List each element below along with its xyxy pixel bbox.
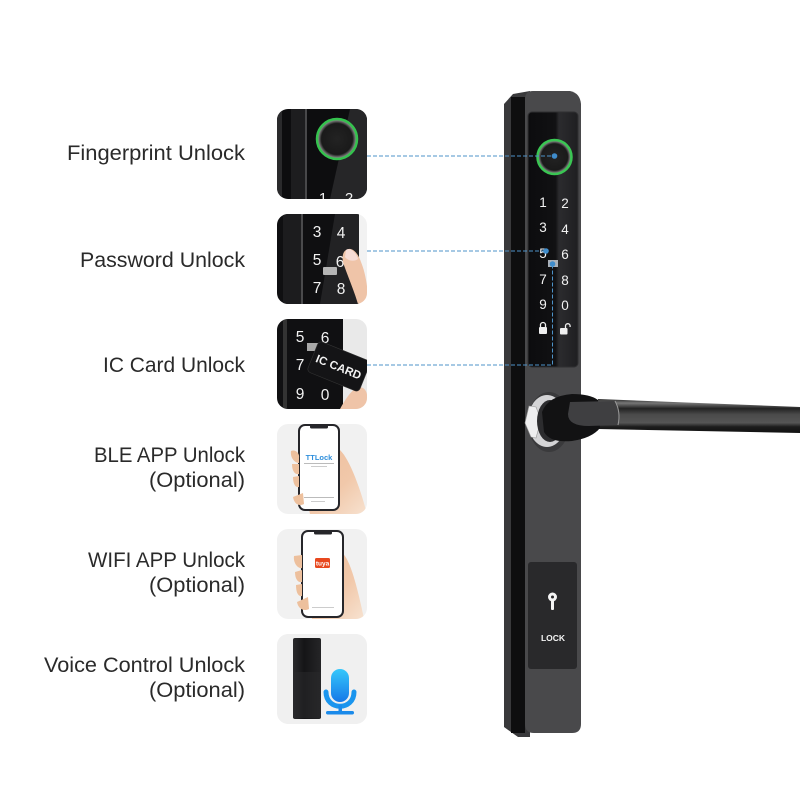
thumbnail: IC card on keypad: 7 [296,357,304,374]
thumbnail: IC card on keypad: 5 [296,329,304,346]
thumbnail: smart speaker and microphone [277,634,367,724]
keypad digits: 9 [539,297,547,312]
lever handle [525,392,800,452]
thumbnail: password keypad with finger: 6 [336,254,344,271]
label: BLE APP Unlock (Optional): BLE APP Unlock [94,443,245,467]
label: WIFI APP Unlock (Optional): WIFI APP Unlock [88,548,245,572]
thumbnail: password keypad with finger: 8 [337,281,345,298]
thumbnail: password keypad with finger [277,214,368,304]
label: Voice Control Unlock (Optional): (Optional) [149,678,245,702]
callout line: fingerprint [367,153,557,159]
keypad digits: 4 [561,222,569,237]
door lock body [504,91,800,737]
label: Password Unlock: Password Unlock [80,248,245,272]
keypad digits: 8 [561,273,569,288]
label: Voice Control Unlock (Optional) [44,653,245,702]
lock side edge [504,91,530,737]
thumbnail: fingerprint sensor [277,109,367,207]
thumbnail: fingerprint sensor: 1 [319,190,327,207]
keypad digits: 1 [539,195,547,210]
keypad digits: 7 [539,272,547,287]
label: BLE APP Unlock (Optional) [94,443,245,492]
label: WIFI APP Unlock (Optional) [88,548,245,597]
keypad digits: 2 [561,196,569,211]
thumbnail: password keypad with finger: 7 [313,280,321,297]
label: BLE APP Unlock (Optional): (Optional) [149,468,245,492]
microphone icon [326,669,354,714]
thumbnail: IC card on keypad [277,319,371,409]
lock icon [539,322,547,334]
thumbnail: Tuya phone in hand [277,529,367,619]
Tuya logo: tuya [316,560,330,568]
label: WIFI APP Unlock (Optional): (Optional) [149,573,245,597]
card reader icon [548,260,558,267]
fingerprint ring [538,140,572,174]
touch panel [528,112,578,367]
keypad digits: 6 [561,247,569,262]
thumbnail: IC card on keypad: 0 [321,387,330,404]
thumbnail: password keypad with finger: 3 [313,224,321,241]
thumbnail: TTLock phone in hand: TTLock [306,453,333,462]
thumbnail: TTLock phone in hand [277,424,367,514]
keypad digits: 5 [539,246,547,261]
speaker [293,638,321,719]
label: Voice Control Unlock (Optional): Voice Control Unlock [44,653,245,677]
keyhole icon [548,592,557,610]
keypad digits: 0 [561,298,569,313]
label: IC Card Unlock: IC Card Unlock [103,353,245,377]
callout line: password [367,248,549,254]
keypad digits: 3 [539,220,547,235]
thumbnail: IC card on keypad: 6 [321,330,329,347]
lock front plate [525,91,581,733]
thumbnail: IC card on keypad: 9 [296,386,304,403]
IC card: IC CARD [314,353,363,382]
unlock icon [560,324,570,334]
label: Fingerprint Unlock: Fingerprint Unlock [67,141,245,165]
key cover panel [528,562,577,669]
key cover panel: LOCK [541,633,566,643]
thumbnail: password keypad with finger: 4 [337,225,346,242]
callout line: IC card [367,261,555,365]
thumbnail: password keypad with finger: 5 [313,252,321,269]
keypad digits [539,195,569,313]
thumbnail: fingerprint sensor: 2 [345,190,353,207]
